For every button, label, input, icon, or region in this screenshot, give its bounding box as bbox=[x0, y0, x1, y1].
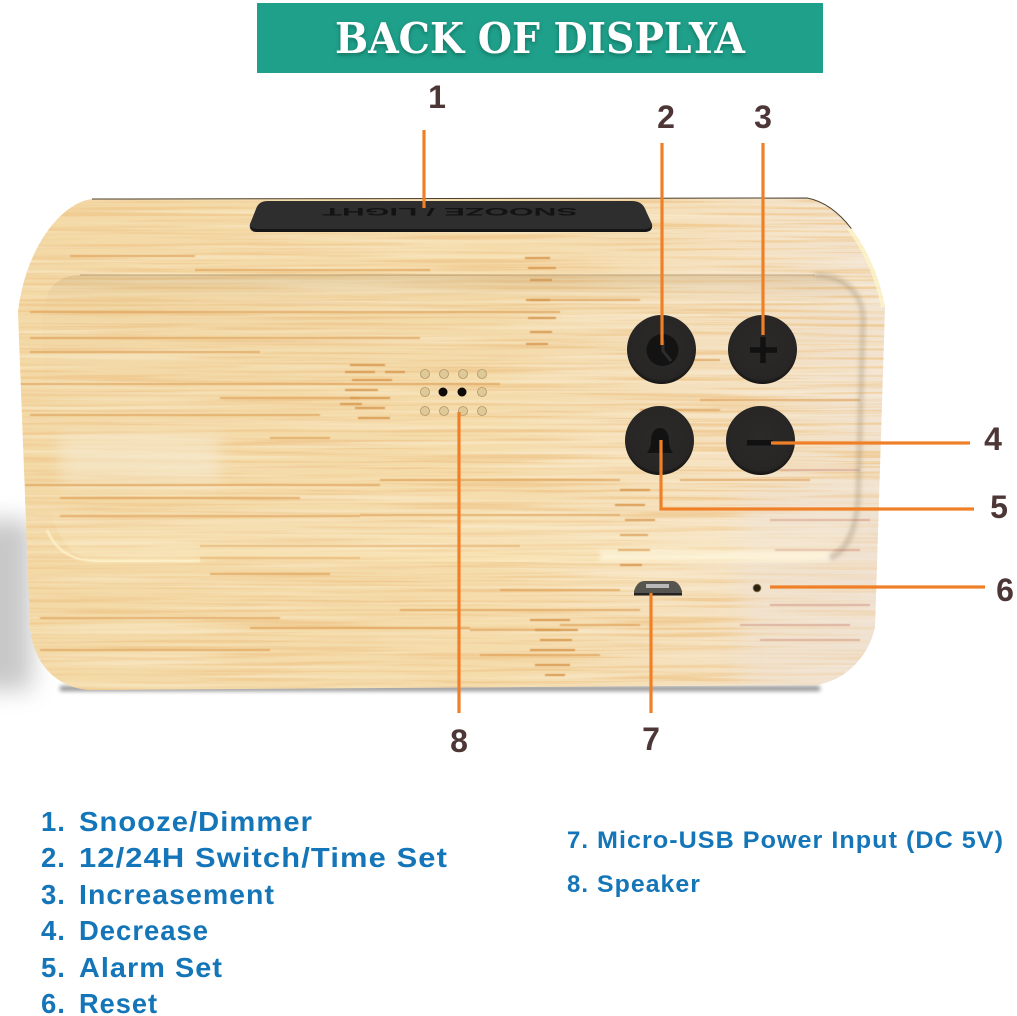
upper-right edge highlight bbox=[848, 228, 885, 308]
callout numbers: 2 bbox=[657, 99, 675, 135]
legend: left column: 2. bbox=[41, 842, 66, 873]
legend: right column: Micro-USB Power Input (DC 5V) bbox=[597, 827, 1004, 854]
leader lines bbox=[424, 130, 985, 713]
legend: right column: 7. bbox=[567, 827, 589, 854]
snooze bar: SNOOZE / LIGHT bbox=[322, 205, 578, 217]
button: clock bbox=[627, 315, 696, 384]
callout numbers: 5 bbox=[990, 489, 1008, 525]
micro-USB port bbox=[634, 581, 682, 596]
legend: left column: 3. bbox=[41, 879, 66, 910]
recessed tray bbox=[42, 275, 863, 562]
shadow under device bbox=[0, 520, 820, 691]
legend: right column: Speaker bbox=[597, 871, 701, 898]
legend: left column: Alarm Set bbox=[79, 952, 223, 983]
button: bell bbox=[625, 406, 694, 475]
callout numbers: 7 bbox=[642, 721, 660, 757]
legend: right column bbox=[567, 827, 1004, 898]
bamboo knots bbox=[340, 258, 655, 675]
legend: left column: Increasement bbox=[79, 879, 275, 910]
top outline bbox=[92, 198, 885, 307]
callout numbers: 6 bbox=[996, 572, 1014, 608]
callout numbers: 1 bbox=[428, 79, 446, 115]
button: minus bbox=[726, 406, 795, 475]
snooze bar bbox=[250, 201, 652, 232]
callout numbers: 4 bbox=[984, 421, 1002, 457]
button: plus bbox=[728, 315, 797, 384]
title banner bbox=[257, 3, 823, 73]
legend: left column: 4. bbox=[41, 915, 66, 946]
grain streaks bbox=[20, 256, 870, 655]
wood grain texture bbox=[0, 190, 900, 700]
pale faded patches bbox=[60, 435, 890, 690]
legend: right column: 8. bbox=[567, 871, 589, 898]
legend: left column: Snooze/Dimmer bbox=[79, 806, 313, 837]
title banner: BACK OF DISPLYA bbox=[335, 14, 746, 63]
reset hole bbox=[753, 584, 761, 592]
legend: left column: 5. bbox=[41, 952, 66, 983]
callout numbers: 3 bbox=[754, 99, 772, 135]
legend: left column: Decrease bbox=[79, 915, 209, 946]
legend: left column: 1. bbox=[41, 806, 66, 837]
legend: left column bbox=[41, 806, 448, 1016]
callout numbers: 8 bbox=[450, 723, 468, 759]
legend: left column: 12/24H Switch/Time Set bbox=[79, 842, 448, 873]
callout numbers bbox=[428, 79, 1014, 759]
wooden clock body bbox=[0, 190, 900, 700]
speaker grille bbox=[420, 370, 486, 416]
